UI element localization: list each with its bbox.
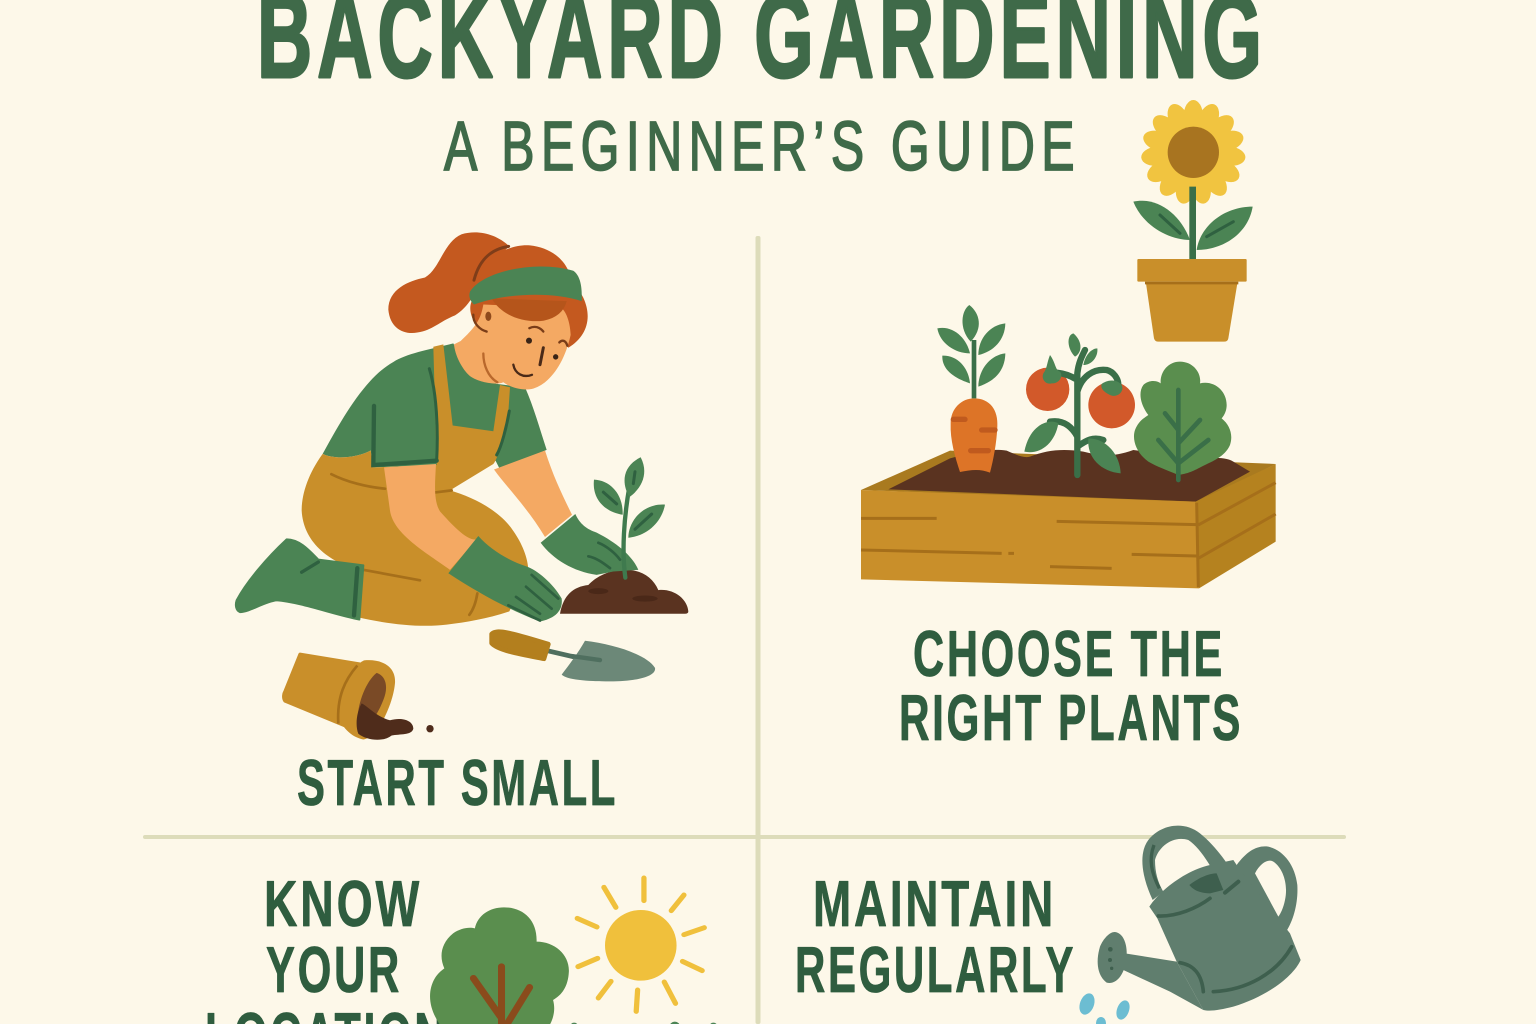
right arm [494,451,572,537]
illustration: watering can [1098,826,1301,1011]
left arm [384,464,477,570]
water drops [1077,991,1132,1024]
label: choose the right plants: RIGHT PLANTS [899,681,1243,754]
trowel [492,632,655,681]
subtitle: A BEGINNER’S GUIDE [444,107,1081,185]
label: start small: START SMALL [297,746,618,819]
illustration: gardener kneeling [236,232,688,740]
panel: start small [236,232,688,819]
label: choose the right plants [899,617,1243,754]
label: know your location: YOUR [266,933,402,1006]
hair [470,245,588,348]
boot [236,539,363,620]
panel: maintain regularly [795,826,1301,1024]
label: maintain regularly: MAINTAIN [813,867,1056,940]
panel: choose the right plants [861,100,1276,754]
handles [1142,826,1238,900]
label: maintain regularly [795,867,1076,1006]
raised bed front and side [861,464,1276,588]
panel: know your location [205,867,718,1024]
illustration: potted sunflower and raised bed [861,100,1276,588]
spout [1123,953,1203,1010]
overalls [302,344,528,626]
raised bed back [861,451,1276,503]
face and neck [454,304,571,389]
potted sunflower [1133,100,1253,342]
shirt [323,343,547,469]
grass tips [570,1022,718,1024]
label: maintain regularly: REGULARLY [795,933,1076,1006]
illustration: tree, sun and grass [430,878,718,1024]
headband [469,266,582,304]
body [1149,860,1301,1011]
label: know your location: KNOW [264,867,422,940]
soil mound [560,570,688,614]
dividers [143,236,1346,1024]
tree [430,907,569,1024]
lettuce [1134,362,1231,480]
ponytail [388,232,509,333]
body details [1189,873,1223,893]
bangs [492,298,567,321]
seedling [594,457,665,578]
sleeve shadow lines [373,369,509,465]
face details [473,315,567,382]
right glove [541,514,638,575]
sun [577,878,704,1011]
label: know your location [205,867,448,1024]
tipped pot [284,654,434,740]
left glove [448,536,562,622]
label: choose the right plants: CHOOSE THE [913,617,1225,690]
soil [888,450,1250,502]
carrot [937,305,1005,473]
tomato plant [1024,333,1135,475]
